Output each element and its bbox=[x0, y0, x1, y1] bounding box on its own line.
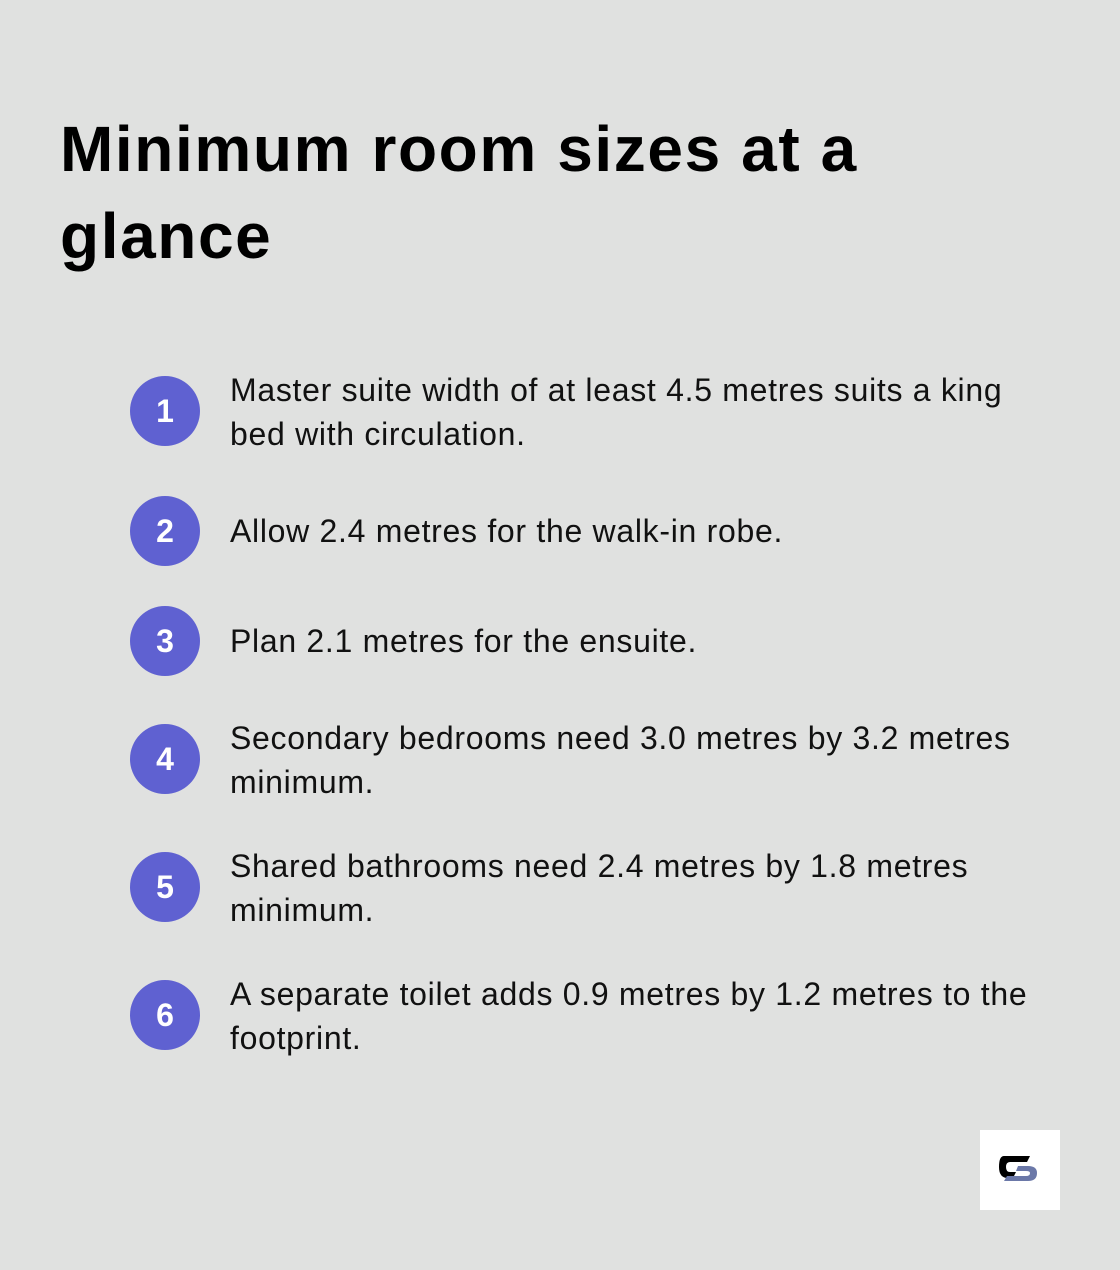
item 6 bbox=[130, 976, 1027, 1056]
item 1: 1 bbox=[156, 393, 174, 429]
item 2 bbox=[130, 496, 783, 566]
item 5: minimum. bbox=[230, 892, 374, 928]
title: Minimum room sizes at a bbox=[60, 113, 858, 185]
item 4 bbox=[130, 720, 1011, 800]
item 2: Allow 2.4 metres for the walk-in robe. bbox=[230, 513, 783, 549]
item 3 bbox=[130, 606, 697, 676]
item 3: 3 bbox=[156, 623, 174, 659]
item 1 bbox=[130, 372, 1002, 452]
item 4: Secondary bedrooms need 3.0 metres by 3.2 metres bbox=[230, 720, 1011, 756]
item 4: 4 bbox=[156, 741, 174, 777]
title: glance bbox=[60, 200, 272, 272]
item 3: Plan 2.1 metres for the ensuite. bbox=[230, 623, 697, 659]
item 6: footprint. bbox=[230, 1020, 362, 1056]
item 6: 6 bbox=[156, 997, 174, 1033]
logo bbox=[980, 1130, 1060, 1210]
item 6: A separate toilet adds 0.9 metres by 1.2 metres to the bbox=[230, 976, 1027, 1012]
item 5: 5 bbox=[156, 869, 174, 905]
item 1: bed with circulation. bbox=[230, 416, 526, 452]
title bbox=[60, 113, 858, 272]
item 4: minimum. bbox=[230, 764, 374, 800]
item 5 bbox=[130, 848, 968, 928]
item 2: 2 bbox=[156, 513, 174, 549]
item 1: Master suite width of at least 4.5 metres suits a king bbox=[230, 372, 1002, 408]
item 5: Shared bathrooms need 2.4 metres by 1.8 metres bbox=[230, 848, 968, 884]
